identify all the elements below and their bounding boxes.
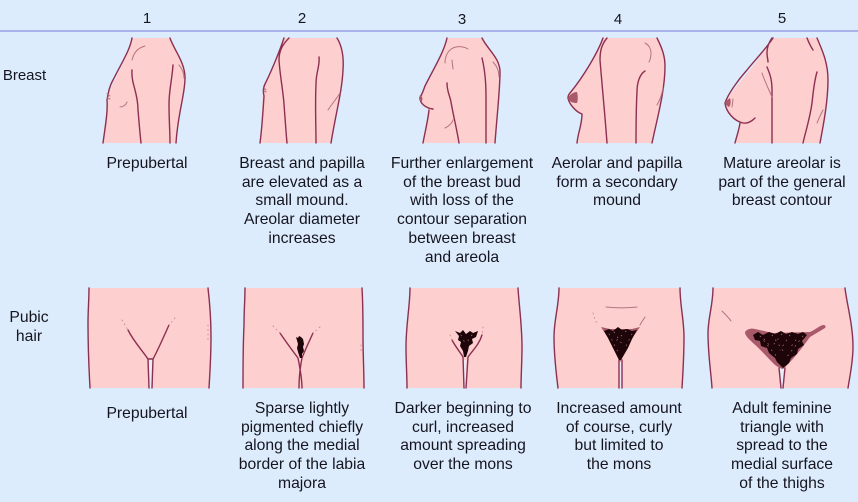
caption: breast stage 4: form a secondary — [556, 174, 678, 191]
breast stage 1 figure — [103, 38, 185, 143]
breast stage 2 figure — [260, 38, 343, 143]
caption: breast stage 4 — [552, 155, 683, 209]
caption: breast stage 3: and areola — [425, 249, 499, 266]
caption: breast stage 4: mound — [593, 192, 641, 209]
caption: pubic hair stage 4: Increased amount — [556, 400, 682, 417]
caption: breast stage 2 — [239, 155, 365, 247]
row label: Pubic hair — [9, 309, 49, 345]
caption: breast stage 5: part of the general — [718, 174, 846, 191]
caption: pubic hair stage 4: but limited to — [575, 437, 664, 454]
row label: Pubic hair: hair — [16, 328, 42, 345]
caption: breast stage 3: between breast — [408, 230, 516, 247]
pubic hair stage 4 figure — [554, 288, 684, 388]
caption: breast stage 2: Breast and papilla — [239, 155, 365, 172]
caption: pubic hair stage 4 — [556, 400, 682, 473]
caption: breast stage 3: contour separation — [397, 211, 527, 228]
breast stage 4 figure — [568, 38, 665, 143]
caption: breast stage 2: are elevated as a — [242, 174, 362, 191]
caption: pubic hair stage 3: curl, increased — [412, 419, 514, 436]
caption: pubic hair stage 2: pigmented chiefly — [241, 419, 363, 436]
caption: breast stage 5: Mature areolar is — [723, 155, 841, 172]
pubic hair stage descriptions — [106, 400, 833, 492]
stage number headings: 4 — [614, 11, 622, 28]
stage number headings: 3 — [458, 11, 466, 28]
caption: breast stage 2: small mound. — [255, 192, 349, 209]
caption: breast stage 5 — [718, 155, 846, 209]
caption: pubic hair stage 5: triangle with — [740, 419, 824, 436]
caption: pubic hair stage 3: amount spreading — [400, 437, 526, 454]
pubic hair stage 2 figure — [243, 288, 364, 388]
caption: breast stage 3: with loss of the — [409, 192, 514, 209]
caption: pubic hair stage 5: Adult feminine — [732, 400, 832, 417]
caption: pubic hair stage 3: over the mons — [413, 456, 513, 473]
stage number headings: 2 — [298, 10, 306, 27]
caption: pubic hair stage 4: the mons — [587, 456, 651, 473]
pubic hair stage 1 figure — [88, 288, 211, 388]
caption: pubic hair stage 1: Prepubertal — [106, 405, 188, 422]
caption: breast stage 2: Areolar diameter — [244, 211, 360, 228]
row label: Pubic hair: Pubic — [9, 309, 49, 326]
caption: pubic hair stage 2: majora — [278, 475, 326, 492]
breast stage 5 figure — [725, 38, 828, 143]
pubic hair stage 5 figure — [708, 288, 853, 388]
stage number headings: 5 — [778, 10, 786, 27]
caption: pubic hair stage 2: along the medial — [244, 437, 360, 454]
caption: breast stage 3: Further enlargement — [391, 155, 534, 172]
caption: breast stage 2: increases — [268, 230, 336, 247]
caption: breast stage 3 — [391, 155, 534, 266]
pubic hair stage 3 figure — [406, 288, 522, 388]
caption: pubic hair stage 2: border of the labia — [239, 456, 365, 473]
stage number headings: 1 — [143, 10, 151, 27]
breast stage descriptions — [106, 155, 846, 266]
row label: Breast: Breast — [3, 67, 47, 84]
caption: pubic hair stage 2: Sparse lightly — [255, 400, 349, 417]
breast stage 3 figure — [419, 38, 500, 143]
caption: pubic hair stage 3: Darker beginning to — [395, 400, 532, 417]
caption: pubic hair stage 5: spread to the — [736, 437, 828, 454]
caption: pubic hair stage 5: medial surface — [731, 456, 833, 473]
caption: pubic hair stage 5: of the thighs — [739, 475, 825, 492]
caption: pubic hair stage 2 — [239, 400, 365, 492]
stage number headings — [143, 10, 786, 28]
caption: breast stage 1: Prepubertal — [106, 155, 188, 172]
caption: breast stage 5: breast contour — [732, 192, 832, 209]
caption: breast stage 4: Aerolar and papilla — [552, 155, 683, 172]
caption: breast stage 3: of the breast bud — [403, 174, 521, 191]
caption: pubic hair stage 5 — [731, 400, 833, 492]
caption: pubic hair stage 4: of course, curly — [566, 419, 672, 436]
caption: pubic hair stage 3 — [395, 400, 532, 473]
